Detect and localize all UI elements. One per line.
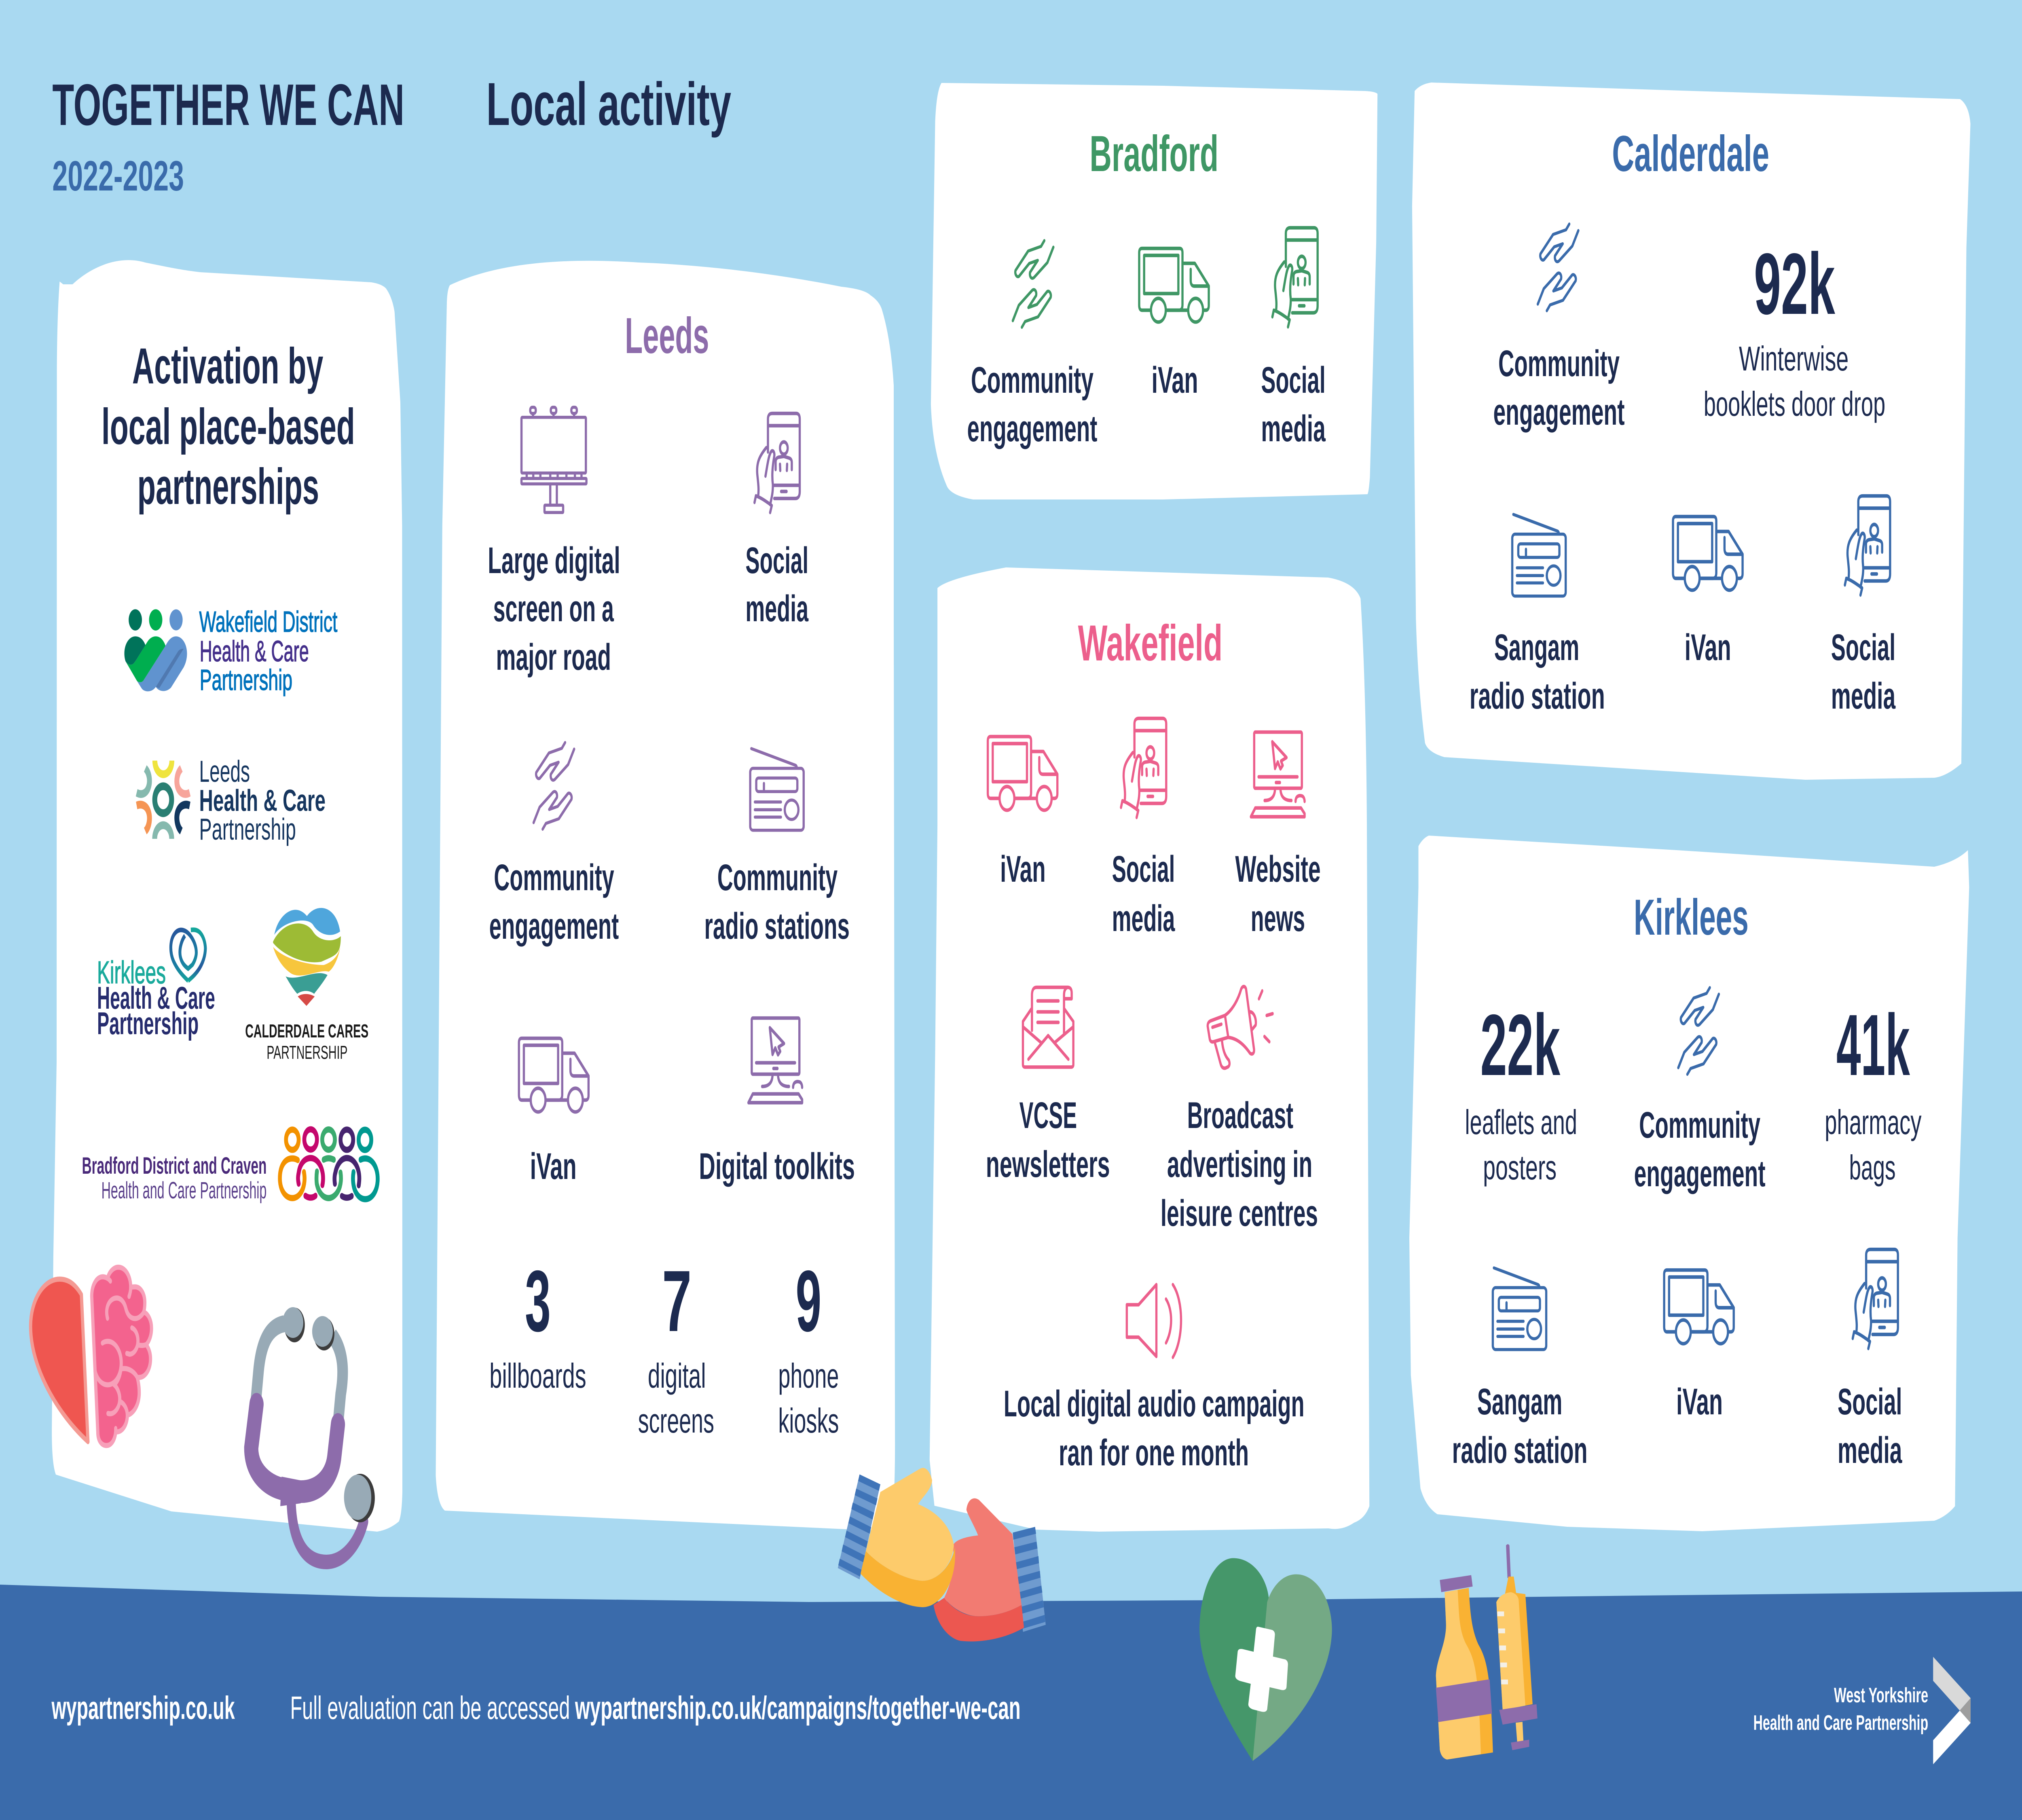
footer text: Full evaluation: wypartnership.co.uk/campaigns/together-we-can <box>575 1690 1021 1726</box>
label: Social media <box>1261 360 1326 449</box>
label: Website news <box>1235 849 1321 939</box>
stat: 41k pharmacy bags: 41k <box>1836 997 1910 1094</box>
heading: Wakefield: Wakefield <box>1078 615 1223 672</box>
logo: Kirklees Health & Care Partnership <box>97 930 215 1041</box>
heading: Kirklees: Kirklees <box>1634 889 1749 946</box>
label: Community engagement <box>967 360 1097 449</box>
label: VCSE newsletters: newsletters <box>986 1144 1110 1185</box>
heading: Bradford: Bradford <box>1089 126 1218 182</box>
logo: Wakefield District Health & Care Partnership <box>124 605 338 696</box>
panel: Wakefield <box>930 567 1369 1532</box>
label: Local digital audio campaign ran for one month <box>1004 1383 1305 1473</box>
label: Social media <box>1112 849 1175 939</box>
icon: phone <box>755 413 800 512</box>
label: iVan: iVan <box>1000 849 1046 890</box>
label: Broadcast advertising in leisure centres: advertising in <box>1167 1144 1312 1185</box>
logo: Kirklees Health & Care Partnership: Health & Care <box>97 980 215 1016</box>
icon: radio <box>1493 1268 1546 1350</box>
label: Community radio stations: radio stations <box>704 906 850 947</box>
label: Community engagement: Community <box>1639 1105 1760 1146</box>
stat: 7 digital screens <box>638 1253 714 1440</box>
label: Social media: Social <box>1112 849 1175 890</box>
icon: hands <box>1678 988 1719 1074</box>
illustration: heart and brain <box>31 1267 152 1445</box>
logo: Leeds Health & Care Partnership <box>137 755 326 847</box>
label: Social media <box>745 540 809 629</box>
stat: 3 billboards: billboards <box>489 1357 586 1395</box>
logo: Bradford District and Craven Health and Care Partnership <box>82 1129 378 1204</box>
label: Sangam radio station <box>1470 627 1605 717</box>
stat: 41k pharmacy bags: bags <box>1849 1149 1895 1187</box>
icon: radio <box>1512 514 1566 596</box>
stat: 22k leaflets and posters: leaflets and <box>1465 1103 1577 1142</box>
logo: Bradford District and Craven Health and Care Partnership: Bradford District and Craven <box>82 1153 266 1179</box>
icon: truck <box>519 1038 588 1112</box>
icon: phone <box>1121 718 1166 817</box>
illustration: green heart with cross <box>1199 1558 1332 1761</box>
logo: Kirklees Health & Care Partnership: Kirklees <box>97 954 166 990</box>
panel: Calderdale <box>1412 83 1970 780</box>
stat: 22k leaflets and posters: 22k <box>1481 997 1560 1094</box>
icon: hands <box>1013 241 1053 327</box>
label: Social media: media <box>745 588 809 629</box>
footer text: Full evaluation <box>290 1690 1021 1726</box>
logo: Kirklees Health & Care Partnership: Partnership <box>97 1005 199 1041</box>
icon: monitor <box>1251 732 1305 817</box>
label: Social media: Social <box>1838 1381 1902 1422</box>
label: Social media: media <box>1838 1430 1902 1471</box>
icon: monitor <box>749 1018 802 1103</box>
label: Large digital screen on a major road <box>488 540 620 678</box>
icon: truck <box>1673 516 1743 590</box>
label: iVan: iVan <box>1685 627 1731 668</box>
logo: Calderdale Cares Partnership: CALDERDALE CARES <box>245 1021 368 1042</box>
label: Sangam radio station <box>1452 1381 1588 1471</box>
stat: 92k Winterwise booklets door drop: booklets door drop <box>1704 385 1885 423</box>
icon: truck <box>1139 248 1209 322</box>
logo: Wakefield District Health & Care Partnership: Wakefield District <box>199 605 338 638</box>
icon: hands <box>1538 224 1578 311</box>
label: Community engagement: Community <box>971 360 1093 401</box>
label: Community engagement <box>1493 343 1624 433</box>
stat: 3 billboards <box>489 1253 586 1395</box>
label: Local digital audio campaign ran for one month: ran for one month <box>1059 1432 1249 1473</box>
footer logo: West Yorkshire Health and Care Partnership <box>1753 1657 1971 1764</box>
label: Community engagement: engagement <box>967 408 1097 449</box>
icon: speaker <box>1127 1285 1181 1357</box>
stat: 92k Winterwise booklets door drop: Winterwise <box>1739 340 1849 378</box>
stat: 9 phone kiosks: kiosks <box>778 1402 839 1440</box>
stat: 92k Winterwise booklets door drop <box>1704 235 1885 423</box>
label: Website news: news <box>1251 898 1305 939</box>
label: Local digital audio campaign ran for one month: Local digital audio campaign <box>1004 1383 1305 1424</box>
panel: Leeds <box>436 261 895 1531</box>
label: Website news: Website <box>1235 849 1321 890</box>
panel heading <box>102 338 355 515</box>
label: Social media: media <box>1831 675 1896 717</box>
stat: 7 digital screens: screens <box>638 1402 714 1440</box>
label: Broadcast advertising in leisure centres: leisure centres <box>1161 1193 1318 1234</box>
label: Community engagement: engagement <box>1493 392 1624 433</box>
label: Social media: Social <box>1261 360 1326 401</box>
label: Community engagement: engagement <box>489 906 619 947</box>
label: Large digital screen on a major road: screen on a <box>493 588 614 629</box>
label: Social media: Social <box>1831 627 1895 668</box>
stat: 3 billboards: 3 <box>525 1253 551 1350</box>
label: Broadcast advertising in leisure centres <box>1161 1095 1318 1234</box>
label: Sangam radio station: radio station <box>1452 1430 1588 1471</box>
subtitle: year: 2022-2023 <box>52 152 184 200</box>
illustration: bottle and syringe <box>1436 1544 1538 1760</box>
label: Sangam radio station: Sangam <box>1477 1381 1562 1422</box>
label: Digital toolkits: Digital toolkits <box>699 1146 855 1187</box>
label: Community engagement: Community <box>1498 343 1620 384</box>
label: Social media: media <box>1112 898 1175 939</box>
label: Large digital screen on a major road: Large digital <box>488 540 620 581</box>
label: Social media: media <box>1261 408 1326 449</box>
label: Community engagement <box>489 857 619 947</box>
panel heading: local place-based <box>102 399 355 455</box>
panel: Bradford <box>931 83 1377 499</box>
label: Community engagement: engagement <box>1634 1153 1766 1194</box>
stat: 41k pharmacy bags: pharmacy <box>1825 1103 1922 1142</box>
footer logo: West Yorkshire Health and Care Partnership: West Yorkshire <box>1834 1684 1928 1707</box>
icon: radio <box>750 749 804 830</box>
stat: 22k leaflets and posters: posters <box>1483 1149 1557 1187</box>
icon: phone <box>1272 228 1318 327</box>
label: iVan: iVan <box>1676 1381 1723 1422</box>
logo: Wakefield District Health & Care Partnership: Partnership <box>200 664 292 696</box>
label: iVan: iVan <box>530 1146 577 1187</box>
stat: 7 digital screens: 7 <box>662 1253 692 1350</box>
stat: 9 phone kiosks: 9 <box>796 1253 821 1350</box>
stat: 9 phone kiosks: phone <box>778 1357 839 1395</box>
panel: Kirklees <box>1409 836 1969 1531</box>
logo: Wakefield District Health & Care Partnership: Health & Care <box>200 635 309 668</box>
label: VCSE newsletters: VCSE <box>1019 1095 1077 1136</box>
footer band <box>0 1585 2022 1820</box>
label: Social media <box>1838 1381 1902 1471</box>
label: Social media <box>1831 627 1896 717</box>
icon: phone <box>1853 1249 1898 1348</box>
stat: 41k pharmacy bags <box>1825 997 1922 1187</box>
footer logo: West Yorkshire Health and Care Partnership: Health and Care Partnership <box>1753 1711 1928 1735</box>
icon: billboard <box>522 407 586 512</box>
logo: Calderdale Cares Partnership: PARTNERSHIP <box>266 1042 347 1063</box>
label: Community radio stations: Community <box>717 857 838 898</box>
panel: Activation by local place-based partnerships <box>52 260 402 1532</box>
panel heading: partnerships <box>137 459 319 515</box>
label: Community radio stations <box>704 857 850 947</box>
stat: 9 phone kiosks <box>778 1253 839 1440</box>
icon: hands <box>533 743 574 829</box>
icon: truck <box>1664 1270 1734 1344</box>
label: Broadcast advertising in leisure centres: Broadcast <box>1187 1095 1293 1136</box>
label: Large digital screen on a major road: major road <box>496 637 611 678</box>
logo: Leeds Health & Care Partnership: Health & Care <box>199 784 326 818</box>
footer link: wypartnership.co.uk: wypartnership.co.uk <box>51 1690 235 1726</box>
label: iVan: iVan <box>1152 360 1198 401</box>
icon: phone <box>1845 496 1890 595</box>
label: VCSE newsletters <box>986 1095 1110 1185</box>
illustration: stethoscope <box>251 1307 375 1562</box>
icon: megaphone <box>1208 986 1273 1068</box>
stat: 22k leaflets and posters <box>1465 997 1577 1187</box>
label: Sangam radio station: radio station <box>1470 675 1605 717</box>
label: Community engagement: Community <box>494 857 614 898</box>
illustration: gloves thumbs up <box>838 1468 1046 1642</box>
logo: Bradford District and Craven Health and Care Partnership: Health and Care Partnership <box>102 1177 266 1204</box>
title: Local activity: Local activity <box>486 70 731 138</box>
heading: Leeds: Leeds <box>625 308 709 364</box>
panel heading: Activation by <box>132 338 323 395</box>
label: Sangam radio station: Sangam <box>1494 627 1579 668</box>
logo: Leeds Health & Care Partnership: Leeds <box>199 755 250 789</box>
label: Social media: Social <box>745 540 808 581</box>
footer text: Full evaluation: Full evaluation can be accessed <box>290 1690 570 1726</box>
heading: Calderdale: Calderdale <box>1612 126 1769 182</box>
icon: envelope <box>1023 987 1073 1067</box>
logo: Calderdale Cares Partnership <box>245 908 368 1063</box>
icon: truck <box>988 736 1058 810</box>
label: Community engagement <box>1634 1105 1766 1194</box>
stat: 7 digital screens: digital <box>648 1357 706 1395</box>
logo: Leeds Health & Care Partnership: Partnership <box>199 813 296 847</box>
stat: 92k Winterwise booklets door drop: 92k <box>1754 235 1835 332</box>
title: Together We Can: TOGETHER WE CAN <box>52 72 404 138</box>
